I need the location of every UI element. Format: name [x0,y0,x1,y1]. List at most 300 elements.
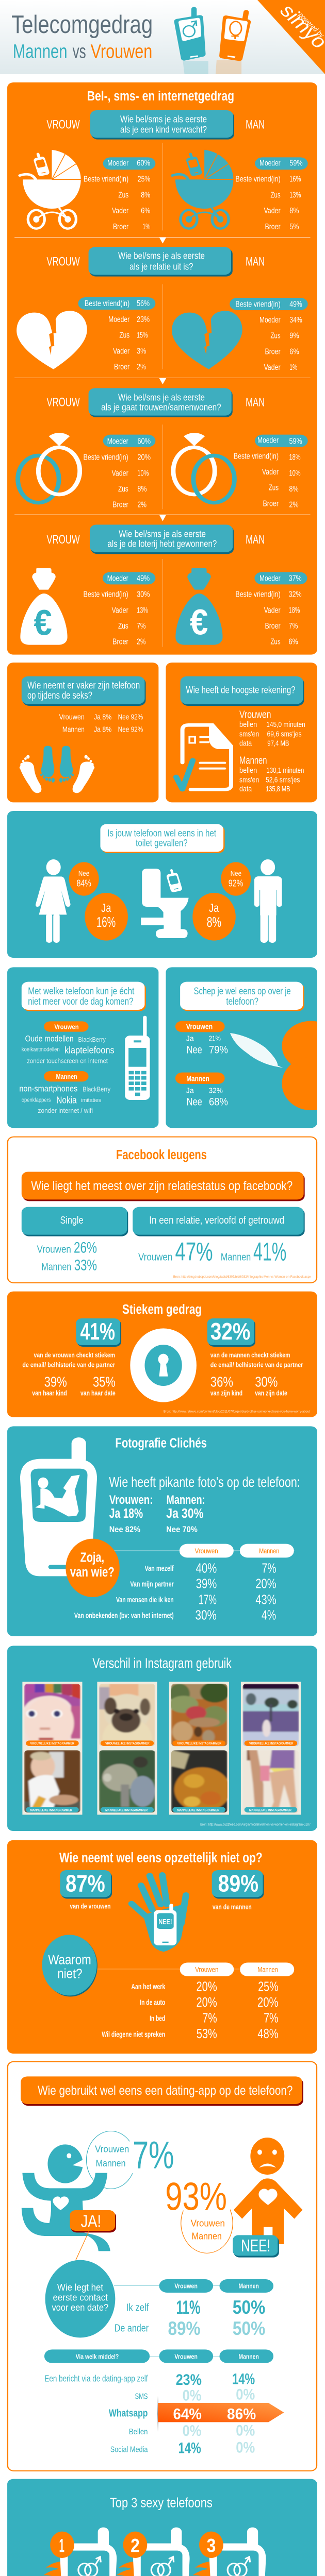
phone 1: iPhone5 [50,2528,117,2576]
question: loterij [90,524,234,554]
stats man: kind: Vader [264,206,281,215]
question: loterij: Wie bel/sms je als eerste [119,529,206,539]
label vrouw: VROUW [46,117,80,131]
stat vrouwen: 35% [93,1374,116,1390]
stats single: 33% [74,1257,97,1274]
stats man: relatie: 34% [289,315,302,325]
stats single: Vrouwen [37,1243,71,1255]
word cloud vrouwen: BlackBerry [78,1036,106,1043]
heading: Fotografie Clichés [115,1436,207,1451]
photo: baby with hat [24,1684,80,1749]
question and results: Nee 70% [166,1524,198,1534]
table waarom niet: 7% [203,2011,217,2026]
arrow: whatsapp: 64% [173,2405,202,2423]
stats man: kind: Broer [265,222,281,231]
stat mannen: van zijn kind [210,1389,242,1397]
card backgrounds [22,1682,301,1815]
stats man: relatie: Vader [264,363,281,372]
icon: white pram [20,150,83,229]
icon: feather [230,1033,283,1068]
icon: old phone [125,1016,150,1100]
table via welk middel: Een bericht via de dating-app zelf [44,2374,148,2384]
stats man: relatie: 49% [289,300,302,309]
speech bubble nee: 93% [165,2175,227,2218]
pill mannen: Mannen [238,2283,259,2290]
question [22,982,146,1011]
table via welk middel: 0% [183,2387,202,2404]
stats vrouw: kind: 1% [142,222,150,231]
stats mannen: Ja [186,1087,194,1095]
panel: telefoon in toilet [7,811,317,958]
icon: sad figure [234,2138,303,2244]
table van wie: Van mijn partner [130,1580,174,1588]
word cloud mannen: Nokia [56,1095,77,1106]
button single [22,1207,128,1236]
stats man: relatie: Zus [270,331,281,340]
icon: rings vrouw [18,433,80,503]
table waarom niet: In de auto [140,1998,165,2007]
stat vrouw ja: Ja [101,902,111,914]
block: loterij [20,515,307,647]
stats vrouw: trouwen: 20% [137,453,151,462]
phone 2: Samsung Galaxy: 2 [131,2535,140,2556]
stats vrouwen [239,708,305,748]
panel: top 3 sexy telefoons [7,2479,317,2576]
speech bubble nee: Mannen [192,2231,222,2242]
arrow down [159,238,166,244]
subtitle: vs [73,40,86,62]
stats vrouwen: 69,6 sms'jes [267,730,302,738]
stats man: loterij: 7% [289,621,298,631]
speech bubble ja: Vrouwen [95,2144,129,2155]
heading: Bel-, sms- en internetgedrag [87,89,234,104]
stats man: loterij: Broer [265,621,281,631]
table waarom niet: 48% [257,2026,279,2041]
word cloud vrouwen: zonder touchscreen en internet [27,1057,108,1065]
table waarom niet: 20% [196,1995,217,2010]
stats man: trouwen: Beste vriend(in) [234,452,279,461]
stat vrouwen [60,1870,112,1910]
subtitle [13,40,152,62]
panel: bel-, sms- en internetgedrag [7,82,317,655]
stats mannen: data [239,785,252,793]
panel: welke telefoon [7,967,158,1128]
stat vrouw ja [85,893,128,941]
stats eerste contact [115,2297,265,2339]
stats man: loterij: Moeder [259,574,281,583]
stat vrouwen [22,1318,121,1397]
heading: Stiekem gedrag [122,1302,202,1317]
stats man: kind: 5% [289,222,299,231]
stats mannen: Mannen [186,1075,209,1083]
answer nee [233,2235,279,2258]
stats relatie: Mannen [221,1251,251,1263]
stat man ja: Ja [209,902,219,914]
photo: baby with cigarette [24,1750,80,1812]
stat vrouwen: 39% [44,1374,67,1390]
stats: Ja 8% [94,725,111,734]
word cloud vrouwen: Oude modellen [25,1033,74,1043]
word cloud mannen: openklappers [22,1096,51,1103]
stats vrouw: relatie: Beste vriend(in) [85,299,129,308]
word cloud mannen: Mannen [56,1073,77,1081]
stats man: relatie: 1% [289,363,297,372]
stats mannen: 52,6 sms'jes [266,776,300,784]
stats vrouw: relatie: 15% [137,331,148,340]
stats man: loterij [235,572,307,646]
stats eerste contact: 50% [233,2297,265,2318]
stat vrouwen: 41% [80,1318,115,1345]
table van wie: 17% [199,1592,217,1607]
panel: fotografie cliches [7,1426,317,1636]
question: niet meer voor de dag komen? [28,996,133,1007]
stat mannen [212,1870,264,1911]
pill mannen: Mannen [238,2353,259,2361]
table van wie: Van onbekenden (bv: van het internet) [74,1612,174,1620]
stats relatie: 47% [175,1238,213,1266]
stats vrouw: trouwen: 2% [137,500,147,509]
stat vrouw ja: 16% [96,914,116,930]
label: MANNELIJKE INSTAGRAMMER [105,1809,148,1812]
pill mannen [240,1544,294,1557]
icon: keyhole [130,1328,197,1402]
table van wie: 30% [195,1608,217,1623]
table waarom niet: 20% [196,1979,217,1994]
table via welk middel: 0% [183,2422,202,2439]
stats vrouw: loterij: Vader [112,606,128,615]
stats man: loterij: Vader [264,606,281,615]
table via welk middel: 23% [176,2371,202,2388]
stat vrouw nee: Nee [78,870,89,878]
stats vrouwen: Vrouwen [239,708,271,720]
stats vrouw: kind: Zus [118,191,128,199]
stats vrouw: trouwen: Beste vriend(in) [84,453,128,462]
speech bubble ja [87,2131,174,2189]
stats vrouw: loterij: 7% [137,621,145,631]
speech bubble nee [165,2175,233,2253]
labels vrouw en man: MAN [246,532,265,546]
panel: dating-app [8,2062,317,2471]
question: Is jouw telefoon wel eens in het [107,827,216,839]
label: VROUWELIJKE INSTAGRAMMER [177,1742,221,1745]
stat vrouw nee: 84% [77,878,91,889]
stats man: trouwen: 59% [289,437,302,446]
table waarom niet: 7% [264,2011,279,2026]
bubble zoja: Zoja, [80,1550,104,1565]
bubble waarom niet: niet? [57,1967,83,1981]
icon: rings man [173,433,234,503]
panel: stiekem gedrag [7,1292,317,1417]
phone 2: Samsung Galaxy [123,2528,190,2576]
stats vrouw: relatie [78,297,155,371]
table waarom niet: Aan het werk [131,1982,166,1991]
table van wie: 39% [196,1577,217,1591]
table via welk middel: Social Media [110,2445,148,2454]
stats eerste contact: 89% [168,2318,201,2339]
panel: hoogste rekening [166,663,317,802]
word cloud vrouwen: Vrouwen [54,1023,79,1031]
question [100,824,225,853]
word cloud mannen: non-smartphones [19,1083,77,1093]
bubble eerste contact: voor een date? [52,2302,108,2313]
stats mannen [239,755,304,793]
stats vrouw: trouwen: 8% [137,484,147,494]
speech bubble nee: Vrouwen [191,2218,225,2229]
stats man: kind: 16% [289,175,301,183]
arrow down [159,515,166,521]
heading: Top 3 sexy telefoons [110,2496,213,2511]
table van wie: 4% [262,1608,276,1623]
labels vrouw en man [46,255,265,268]
stats man: loterij: 18% [289,606,300,615]
word cloud vrouwen: klaptelefoons [64,1045,115,1056]
icon: orange muscle [282,1021,317,1110]
stats mannen: Nee [187,1096,202,1108]
stats mannen: Mannen [239,755,267,766]
table via welk middel: 0% [236,2422,255,2439]
stats single: 26% [74,1239,97,1257]
icon: teal money bag [175,568,223,645]
stat vrouwen: van haar date [80,1389,116,1397]
question and results: Mannen: [167,1493,205,1506]
table van wie: 7% [262,1561,277,1576]
stats mannen: 68% [209,1096,228,1108]
icon: teal pram [172,150,235,229]
answer ja [70,2210,116,2232]
table waarom niet: 53% [197,2026,217,2041]
stats vrouw: kind: 8% [141,191,150,199]
pill vrouwen [159,2349,213,2363]
stats vrouw: trouwen: Moeder [107,437,128,446]
table waarom niet: Wil diegene niet spreken [102,2030,165,2039]
bubble zoja [66,1539,120,1597]
label: VROUWELIJKE INSTAGRAMMER [30,1742,74,1745]
photo: pasta [171,1750,228,1812]
stat man ja [192,893,236,941]
stat man nee: Nee [231,870,241,878]
panel: facebook leugens [8,1137,317,1283]
icon: white money bag [20,568,68,645]
table van wie: 43% [255,1592,277,1607]
subtitle: Vrouwen [91,40,152,62]
stats man: kind: 59% [289,159,303,167]
icon: flames [31,2562,212,2576]
icon: hand with phone [132,1875,186,1952]
stats man: trouwen: 18% [289,453,301,462]
pill mannen: Mannen [259,1547,279,1555]
panel: opzettelijk niet opnemen [7,1840,317,2054]
labels vrouw en man: VROUW [46,532,80,546]
stats man: relatie [230,298,308,372]
stats vrouw: kind: Beste vriend(in) [84,175,128,183]
stats: Ja 8% [94,713,111,721]
speech bubble ja: 7% [133,2133,174,2177]
stat mannen: van zijn date [255,1389,287,1397]
panel: opscheppen [166,967,325,1128]
question [21,2076,303,2106]
stat vrouwen: van de vrouwen checkt stiekem [34,1351,115,1359]
pill vrouwen: Vrouwen [195,1966,218,1974]
table via welk middel [44,2370,255,2457]
bubble eerste contact: eerste contact [53,2292,108,2303]
word cloud vrouwen [22,1021,115,1065]
question [22,1172,305,1201]
table via welk middel: 14% [178,2439,201,2457]
stats vrouw: loterij: 2% [137,637,145,646]
labels vrouw en man [46,532,265,546]
stats mannen: bellen [239,766,257,775]
pill via welk middel: Via welk middel? [76,2353,119,2361]
stats relatie: 41% [253,1238,286,1266]
stat mannen: 36% [210,1374,233,1390]
stats vrouwen: Vrouwen [186,1023,213,1031]
stats man: trouwen: 10% [289,469,301,478]
stats vrouwen: 21% [209,1035,221,1043]
question: trouwen: Wie bel/sms je als eerste [118,392,205,403]
stats vrouw: trouwen: 10% [137,469,149,478]
phone 1: iPhone5: 1 [59,2535,64,2556]
icon: bill [176,725,233,789]
stats vrouw: relatie: Moeder [108,315,129,324]
stats vrouwen: sms'en [239,730,259,738]
label [101,1740,154,1746]
header banner [0,0,325,74]
pill mannen [219,2349,273,2363]
table via welk middel: 0% [236,2386,255,2403]
button relatie [133,1207,305,1236]
stats man: trouwen: 2% [289,500,299,509]
icon: man [254,859,282,943]
question: kind verwachten: Wie bel/sms je als eerste [120,114,207,125]
question: op tijdens de seks? [27,690,92,701]
stats man: kind: Beste vriend(in) [235,175,281,183]
stat vrouwen: de email/ belhistorie van de partner [22,1362,115,1369]
title: Telecomgedrag [11,10,153,39]
stats: Mannen [62,725,85,734]
question and results: Ja 18% [109,1506,143,1521]
label: MANNELIJKE INSTAGRAMMER [177,1809,219,1812]
stat man ja: 8% [207,914,221,930]
question: Met welke telefoon kun je écht [28,986,134,997]
label: VROUWELIJKE INSTAGRAMMER [249,1742,294,1745]
question and results: Nee 82% [109,1524,140,1534]
stats vrouw: kind: 60% [137,159,150,167]
photo: pug portrait [99,1684,155,1747]
speech bubble ja: Mannen [96,2158,125,2169]
stats vrouw: relatie: 2% [137,362,146,371]
label: MANNELIJKE INSTAGRAMMER [249,1809,291,1812]
phone 3: HTC [199,2528,266,2576]
icon: teal money bag: € [190,602,208,642]
subtitle: Mannen [13,40,68,62]
heading: Facebook leugens [116,1147,207,1162]
bubble eerste contact: Wie legt het [57,2282,103,2293]
stats man: loterij: Beste vriend(in) [235,590,281,599]
stats vrouw: trouwen: 60% [137,437,151,446]
stat mannen: 32% [210,1318,250,1345]
stats vrouwen: bellen [239,720,257,729]
arrow down [159,378,166,384]
word cloud mannen: zonder internet / wifi [38,1107,93,1115]
stats vrouw: kind: 6% [141,206,150,215]
stats man: loterij: 37% [289,574,302,583]
stats vrouw: relatie: 56% [137,299,150,308]
stat vrouwen: van haar kind [32,1389,67,1397]
pill via welk middel [44,2349,150,2363]
stats eerste contact: 50% [233,2318,265,2339]
answer ja: JA! [81,2212,101,2231]
bubble waarom niet [42,1935,98,1996]
stats man: relatie: Beste vriend(in) [235,300,281,309]
block: relatie uit / trouwen [14,247,310,515]
icon: feet [20,746,94,793]
stats man: trouwen [234,435,308,509]
question: relatie uit [89,247,233,277]
stats vrouwen: 79% [209,1044,228,1056]
stats man: relatie: 6% [289,347,299,356]
question [180,982,304,1011]
arrow: whatsapp: 86% [227,2405,256,2423]
stats man: relatie: 9% [289,331,299,340]
stats man: trouwen: Broer [263,499,279,508]
stats man: trouwen: Moeder [257,436,279,445]
label: MANNELIJKE INSTAGRAMMER [30,1809,72,1812]
question: kind verwachten [90,110,234,140]
stats: Nee 92% [118,725,143,734]
photo: bikini [242,1750,299,1812]
table via welk middel: Bellen [129,2427,148,2436]
labels vrouw en man: VROUW [46,395,80,409]
question: Wie neemt er vaker zijn telefoon [27,680,140,691]
icon: white broken heart [17,311,87,369]
table waarom niet: In bed [150,2014,165,2023]
question: relatie uit: Wie bel/sms je als eerste [118,250,205,261]
table waarom niet [102,1979,279,2041]
table van wie: Van mensen die ik ken [116,1596,174,1604]
stats mannen: 135,8 MB [266,785,290,793]
stats vrouw: relatie: 23% [137,315,150,324]
stats vrouw: loterij: Zus [118,621,128,631]
icon: teal broken heart [172,311,242,369]
stats vrouwen: 145,0 minuten [266,720,305,729]
stats vrouwen: data [239,739,252,748]
stat mannen: 89% [218,1870,258,1897]
stats man: loterij: Zus [270,637,281,646]
question and results: Ja 30% [166,1506,204,1521]
bubble waarom niet: Waarom [48,1953,91,1968]
stats man: kind: 8% [289,206,299,215]
stats vrouwen [175,1021,228,1056]
question: trouwen: als je gaat trouwen/samenwonen? [101,402,221,413]
icon: female phone [216,10,249,74]
photo: pugs [99,1750,155,1812]
stats vrouw: kind: 25% [138,175,150,183]
photo: beach [242,1684,299,1746]
icon: woman [36,859,71,943]
question: relatie uit: als je relatie uit is? [129,261,193,272]
panel: instagram [7,1646,317,1831]
stat man nee [221,862,251,896]
question and results: Vrouwen: [109,1493,153,1506]
icon: male phone [177,7,208,74]
stats mannen: 32% [209,1087,223,1095]
stats vrouw: loterij [84,572,155,646]
stats eerste contact: 11% [176,2297,201,2318]
stats vrouw: loterij: Moeder [107,574,128,583]
word cloud vrouwen: koelkastmodellen [22,1046,60,1053]
word cloud mannen [19,1071,111,1115]
icon: white money bag: € [34,603,52,643]
